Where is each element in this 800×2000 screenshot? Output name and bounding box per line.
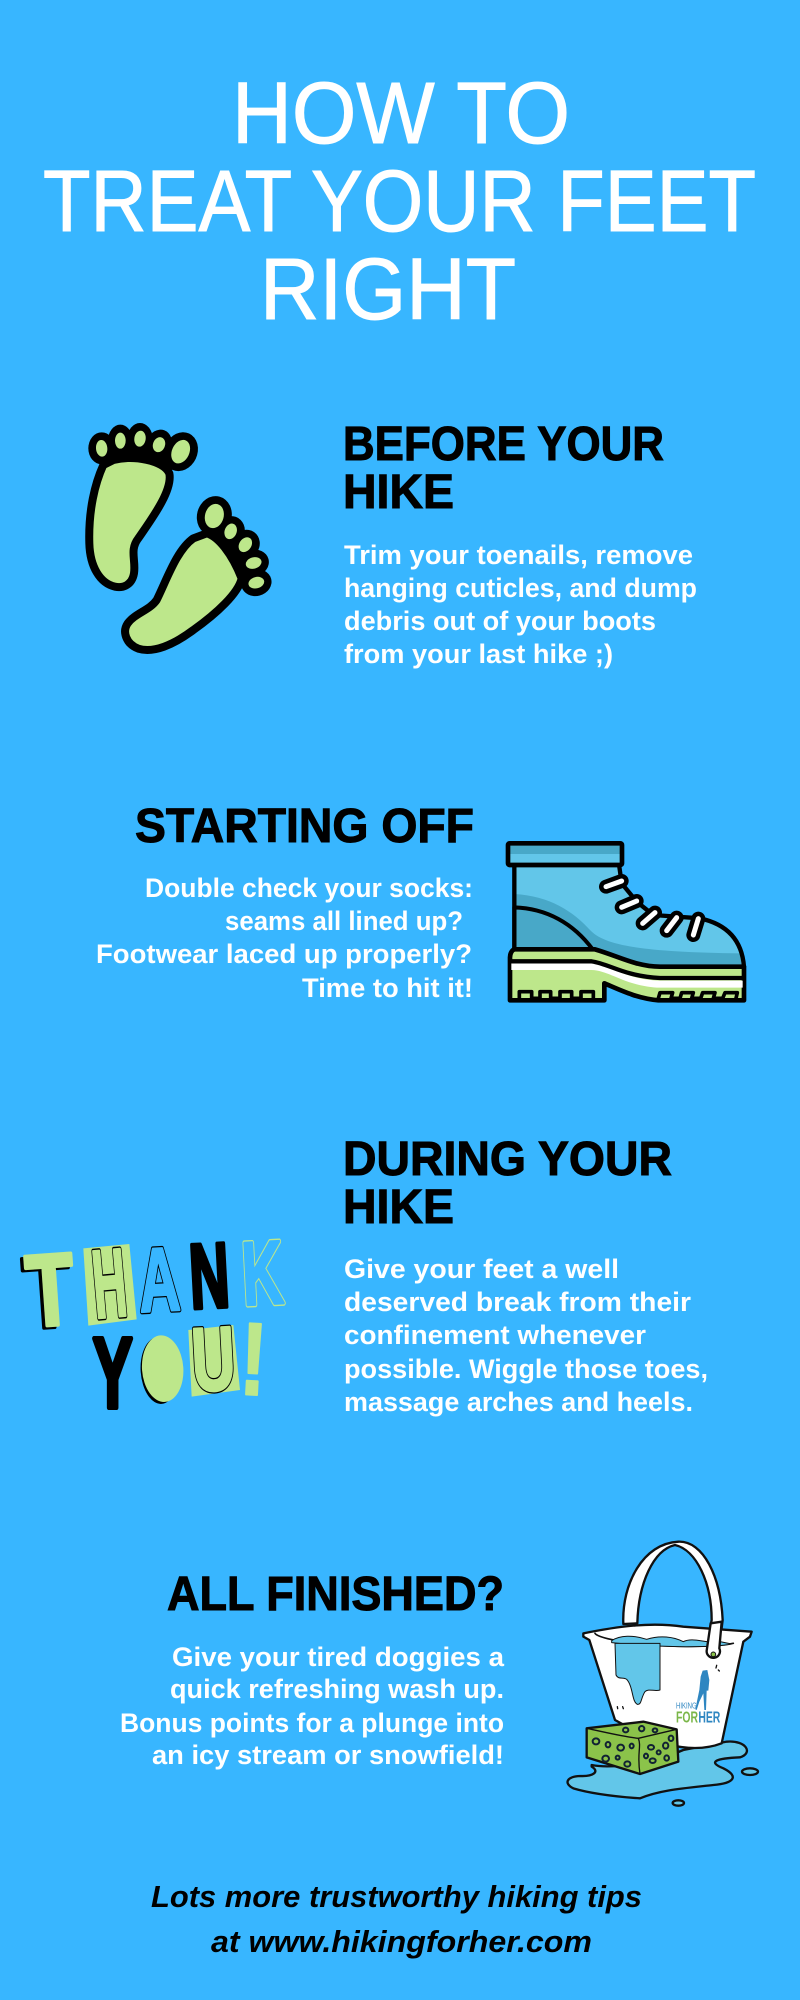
- panel: before your hike: [88, 418, 697, 669]
- text block: during your hike: deserved break from their: [344, 1287, 692, 1317]
- text block: all finished: quick refreshing wash up.: [170, 1674, 504, 1704]
- exclamation mark: !: [237, 1300, 270, 1418]
- icon: thank you lettering: [19, 1222, 285, 1429]
- logo: hiking for her: HER: [698, 1709, 721, 1726]
- letter N: N: [187, 1225, 232, 1329]
- heading: before your hike: BEFORE YOUR: [343, 418, 664, 471]
- letter K: K: [239, 1222, 285, 1324]
- icon: hiking boot: [508, 843, 744, 1000]
- title: HOW TO: [232, 65, 570, 162]
- heading: before your hike: HIKE: [343, 466, 454, 519]
- logo: hiking for her: HIKING: [676, 1700, 697, 1710]
- title: [43, 65, 756, 338]
- letter Y: Y: [93, 1318, 133, 1429]
- text block: during your hike: confinement whenever: [344, 1320, 647, 1350]
- water droplets: [673, 1768, 758, 1806]
- sponge: [587, 1722, 678, 1774]
- text block: during your hike: massage arches and heels.: [344, 1387, 693, 1417]
- text block: all finished: Give your tired doggies a: [172, 1642, 505, 1672]
- letter T: T: [19, 1235, 75, 1351]
- text block: during your hike: [344, 1254, 708, 1417]
- text block: starting off: Double check your socks:: [145, 873, 473, 903]
- panel: all finished: [120, 1542, 758, 1806]
- letter A: A: [136, 1228, 182, 1331]
- title: RIGHT: [260, 241, 516, 338]
- heading: during your hike: HIKE: [343, 1181, 454, 1234]
- letter A: A: [136, 1228, 182, 1331]
- letter H on green patch: H: [88, 1229, 131, 1340]
- panel: starting off: [96, 800, 744, 1003]
- panel: during your hike: [19, 1133, 708, 1429]
- text block: during your hike: possible. Wiggle those toes,: [344, 1354, 708, 1384]
- heading: all finished: ALL FINISHED?: [167, 1568, 504, 1621]
- letter K: K: [239, 1222, 285, 1324]
- text block: starting off: Time to hit it!: [302, 973, 473, 1003]
- heading: before your hike: [343, 418, 664, 519]
- text block: before your hike: [344, 540, 697, 669]
- icon: bucket and sponge: [568, 1542, 758, 1806]
- letter T: T: [22, 1233, 78, 1349]
- text block: before your hike: debris out of your boots: [344, 606, 656, 636]
- footer call to action: [151, 1879, 642, 1959]
- letter O: O: [139, 1319, 183, 1418]
- text block: starting off: Footwear laced up properly?: [96, 939, 472, 969]
- letter H on green patch: H: [88, 1229, 131, 1340]
- heading: during your hike: DURING YOUR: [343, 1133, 672, 1186]
- text block: starting off: seams all lined up?: [225, 906, 463, 936]
- text block: before your hike: Trim your toenails, remove: [344, 540, 693, 570]
- letter U on green patch: U: [189, 1309, 238, 1411]
- footer call to action: at www.hikingforher.com: [211, 1924, 592, 1959]
- logo: hiking for her: [676, 1670, 721, 1726]
- text block: before your hike: hanging cuticles, and dump: [344, 573, 697, 603]
- letter U on green patch: U: [189, 1309, 238, 1411]
- text block: all finished: [120, 1642, 505, 1770]
- text block: all finished: an icy stream or snowfield!: [152, 1740, 504, 1770]
- text block: before your hike: from your last hike ;): [344, 639, 613, 669]
- text block: all finished: Bonus points for a plunge into: [120, 1708, 504, 1738]
- heading: starting off: STARTING OFF: [135, 800, 474, 853]
- icon: green footprints: [88, 423, 275, 650]
- text block: during your hike: Give your feet a well: [344, 1254, 619, 1284]
- text block: starting off: [96, 873, 473, 1003]
- heading: during your hike: [343, 1133, 672, 1234]
- logo: hiking for her: FOR: [676, 1709, 698, 1726]
- footer call to action: Lots more trustworthy hiking tips: [151, 1879, 642, 1914]
